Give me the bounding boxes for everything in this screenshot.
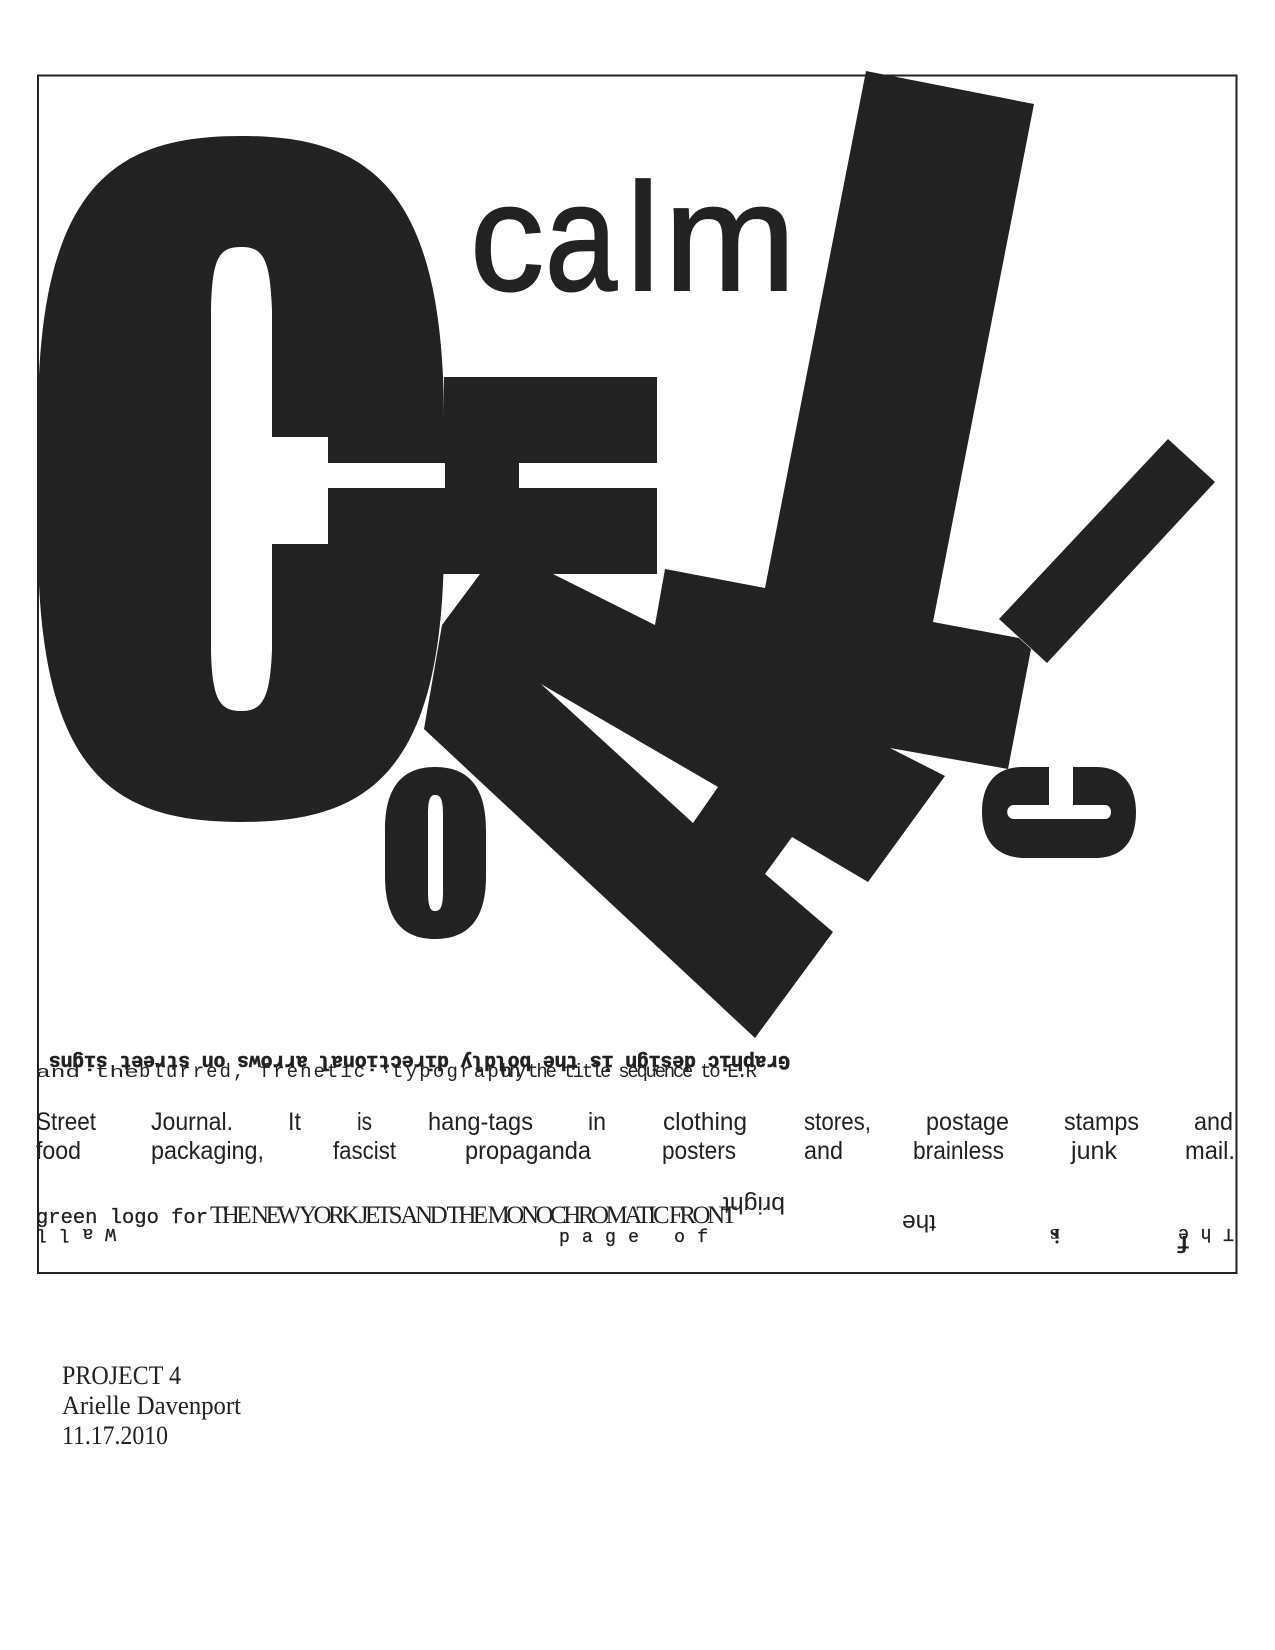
word: calm — [470, 152, 796, 323]
mixed line: green logo: THE NEW YORK JETS AND THE MONOCHROMATIC FRONT — [210, 1202, 737, 1229]
upside-down bold line: Graphic design is the boldly directional arrows on street signs — [49, 1049, 790, 1072]
word: calm: c — [470, 152, 544, 323]
justified line: Street Journal — [36, 1108, 1233, 1136]
justified line: Street Journal: is — [357, 1108, 372, 1136]
justified line: food packaging — [36, 1137, 1235, 1165]
justified line: Street Journal: Street — [36, 1108, 96, 1136]
mixed line one: blurred, frenetic · — [139, 1061, 392, 1083]
project credits — [62, 1361, 242, 1450]
upside-down word: Wall: Wall — [37, 1223, 116, 1243]
justified line: food packaging: and — [804, 1137, 843, 1165]
upside-down word: is: is — [1050, 1224, 1060, 1248]
justified line: food packaging: mail. — [1185, 1137, 1235, 1165]
letter E overlapping the O — [272, 377, 657, 574]
mixed line one: typography — [392, 1061, 526, 1083]
upside-down letter C — [982, 767, 1136, 858]
upside-down word: bright: bright — [723, 1191, 785, 1218]
justified line: Street Journal: Journal. — [151, 1108, 233, 1136]
justified line: food packaging: fascist — [333, 1137, 396, 1165]
project number: PROJECT 4 — [62, 1361, 181, 1390]
upside-down word: The: The — [1178, 1223, 1234, 1243]
rotated letters K and L — [424, 71, 1034, 1038]
giant letter O — [38, 136, 444, 822]
justified line: food packaging: posters — [662, 1137, 736, 1165]
author: Arielle Davenport — [62, 1391, 242, 1420]
mixed line: green logo: green logo for — [36, 1207, 208, 1230]
mixed line one: on the title sequence to E.R — [500, 1061, 757, 1083]
justified line: Street Journal: postage — [926, 1108, 1009, 1136]
frame — [38, 76, 1236, 1273]
justified line: food packaging: food — [36, 1137, 81, 1165]
justified line: Street Journal: clothing — [663, 1108, 747, 1136]
overlapping letter f: f — [1176, 1229, 1190, 1255]
justified line: Street Journal: and — [1194, 1108, 1233, 1136]
body copy block — [36, 1049, 1235, 1255]
big typographic composition — [38, 71, 1215, 1038]
mixed line one — [36, 1061, 757, 1083]
justified line: food packaging: junk — [1070, 1137, 1117, 1165]
spaced words: page of: page of — [559, 1228, 708, 1248]
upside-down word: the: the — [902, 1209, 936, 1236]
word: calm: l — [626, 152, 660, 323]
justified line: Street Journal: in — [588, 1108, 606, 1136]
mixed line one: and the — [36, 1064, 139, 1083]
small letter O — [385, 767, 486, 939]
diagonal slash — [999, 439, 1215, 663]
justified line: food packaging: propaganda — [465, 1137, 591, 1165]
justified line: food packaging: packaging, — [151, 1137, 264, 1165]
word: calm: a — [545, 152, 618, 323]
justified line: Street Journal: hang-tags — [428, 1108, 533, 1136]
justified line: Street Journal: stamps — [1064, 1108, 1139, 1136]
justified line: food packaging: brainless — [913, 1137, 1004, 1165]
date: 11.17.2010 — [62, 1421, 168, 1450]
word: calm: m — [664, 152, 796, 323]
justified line: Street Journal: stores, — [804, 1108, 871, 1136]
justified line: Street Journal: It — [288, 1108, 301, 1136]
